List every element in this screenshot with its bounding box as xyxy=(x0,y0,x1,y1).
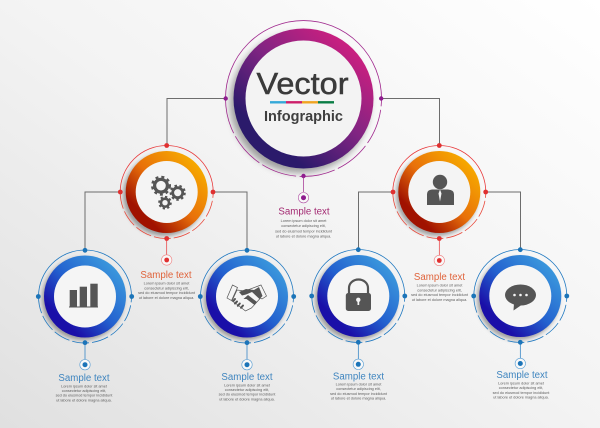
handshake node pointer and label: consectetur adipiscing elit, xyxy=(225,388,269,392)
chat node pointer and label: sed do eiusmod tempor incididunt xyxy=(493,391,550,395)
handshake node pointer and label: Lorem ipsum dolor sit amet xyxy=(224,383,271,387)
gears node pointer and label: consectetur adipiscing elit, xyxy=(144,286,189,290)
bar chart node pointer and label: ut labore et dolore magna aliqua. xyxy=(56,398,112,402)
person node pointer and label: ut labore et dolore magna aliqua. xyxy=(412,298,467,302)
title underline xyxy=(270,101,334,104)
gears node pointer and label: Lorem ipsum dolor sit amet xyxy=(144,282,190,286)
lock node pointer and label xyxy=(330,342,388,401)
icon: chat bubble xyxy=(505,284,536,310)
icon: handshake xyxy=(227,285,266,311)
chat node pointer and label xyxy=(493,342,550,400)
chat node pointer and label: consectetur adipiscing elit, xyxy=(499,386,543,390)
icon: bar chart xyxy=(69,284,98,308)
bar chart node pointer and label: consectetur adipiscing elit, xyxy=(62,389,106,393)
node: person (orange) xyxy=(391,143,488,241)
icon: gears xyxy=(152,177,185,209)
handshake node pointer and label: Sample text xyxy=(221,372,273,383)
handshake node pointer and label xyxy=(219,343,276,401)
main node pointer and label: sed do eiusmod tempor incididunt xyxy=(275,229,333,233)
gears node pointer and label xyxy=(138,238,196,300)
gears node pointer and label: sed do eiusmod tempor incididunt xyxy=(138,291,196,295)
bar chart node pointer and label: Lorem ipsum dolor sit amet xyxy=(61,384,108,388)
bar chart node pointer and label xyxy=(56,343,113,402)
handshake node pointer and label: sed do eiusmod tempor incididunt xyxy=(219,393,276,397)
main node pointer and label: consectetur adipiscing elit, xyxy=(281,224,326,228)
icon: lock xyxy=(346,280,371,311)
main node: vector infographic xyxy=(224,21,383,178)
node: bar chart (blue) xyxy=(36,248,134,345)
lock node pointer and label: ut labore et dolore magna aliqua. xyxy=(331,397,386,401)
title: Vector xyxy=(256,67,348,101)
main node pointer and label: Lorem ipsum dolor sit amet xyxy=(281,219,327,223)
subtitle: Infographic xyxy=(264,109,343,125)
node: gears (orange) xyxy=(118,143,215,241)
bar chart node pointer and label: sed do eiusmod tempor incididunt xyxy=(56,394,113,398)
person node pointer and label xyxy=(411,238,469,302)
node: lock (blue) xyxy=(309,247,407,345)
handshake node pointer and label: ut labore et dolore magna aliqua. xyxy=(219,397,275,401)
gears node pointer and label: ut labore et dolore magna aliqua. xyxy=(139,296,194,300)
lock node pointer and label: Lorem ipsum dolor sit amet xyxy=(336,382,382,386)
icon: person xyxy=(427,175,454,205)
node: chat (blue) xyxy=(471,247,569,345)
chat node pointer and label: ut labore et dolore magna aliqua. xyxy=(493,396,549,400)
person node pointer and label: consectetur adipiscing elit, xyxy=(417,288,462,292)
person node pointer and label: sed do eiusmod tempor incididunt xyxy=(411,293,469,297)
lock node pointer and label: sed do eiusmod tempor incididunt xyxy=(330,392,388,396)
connector lines xyxy=(85,98,520,250)
person node pointer and label: Lorem ipsum dolor sit amet xyxy=(417,284,463,288)
lock node pointer and label: consectetur adipiscing elit, xyxy=(336,387,381,391)
main node pointer and label xyxy=(275,176,333,238)
bar chart node pointer and label: Sample text xyxy=(58,373,110,384)
chat node pointer and label: Lorem ipsum dolor sit amet xyxy=(498,382,545,386)
gears node pointer and label: Sample text xyxy=(140,270,192,281)
person node pointer and label: Sample text xyxy=(414,272,465,283)
main node pointer and label: Sample text xyxy=(278,206,330,218)
node: handshake (blue) xyxy=(198,248,296,345)
lock node pointer and label: Sample text xyxy=(333,372,384,382)
main node pointer and label: ut labore et dolore magna aliqua. xyxy=(276,234,331,238)
chat node pointer and label: Sample text xyxy=(496,370,548,381)
